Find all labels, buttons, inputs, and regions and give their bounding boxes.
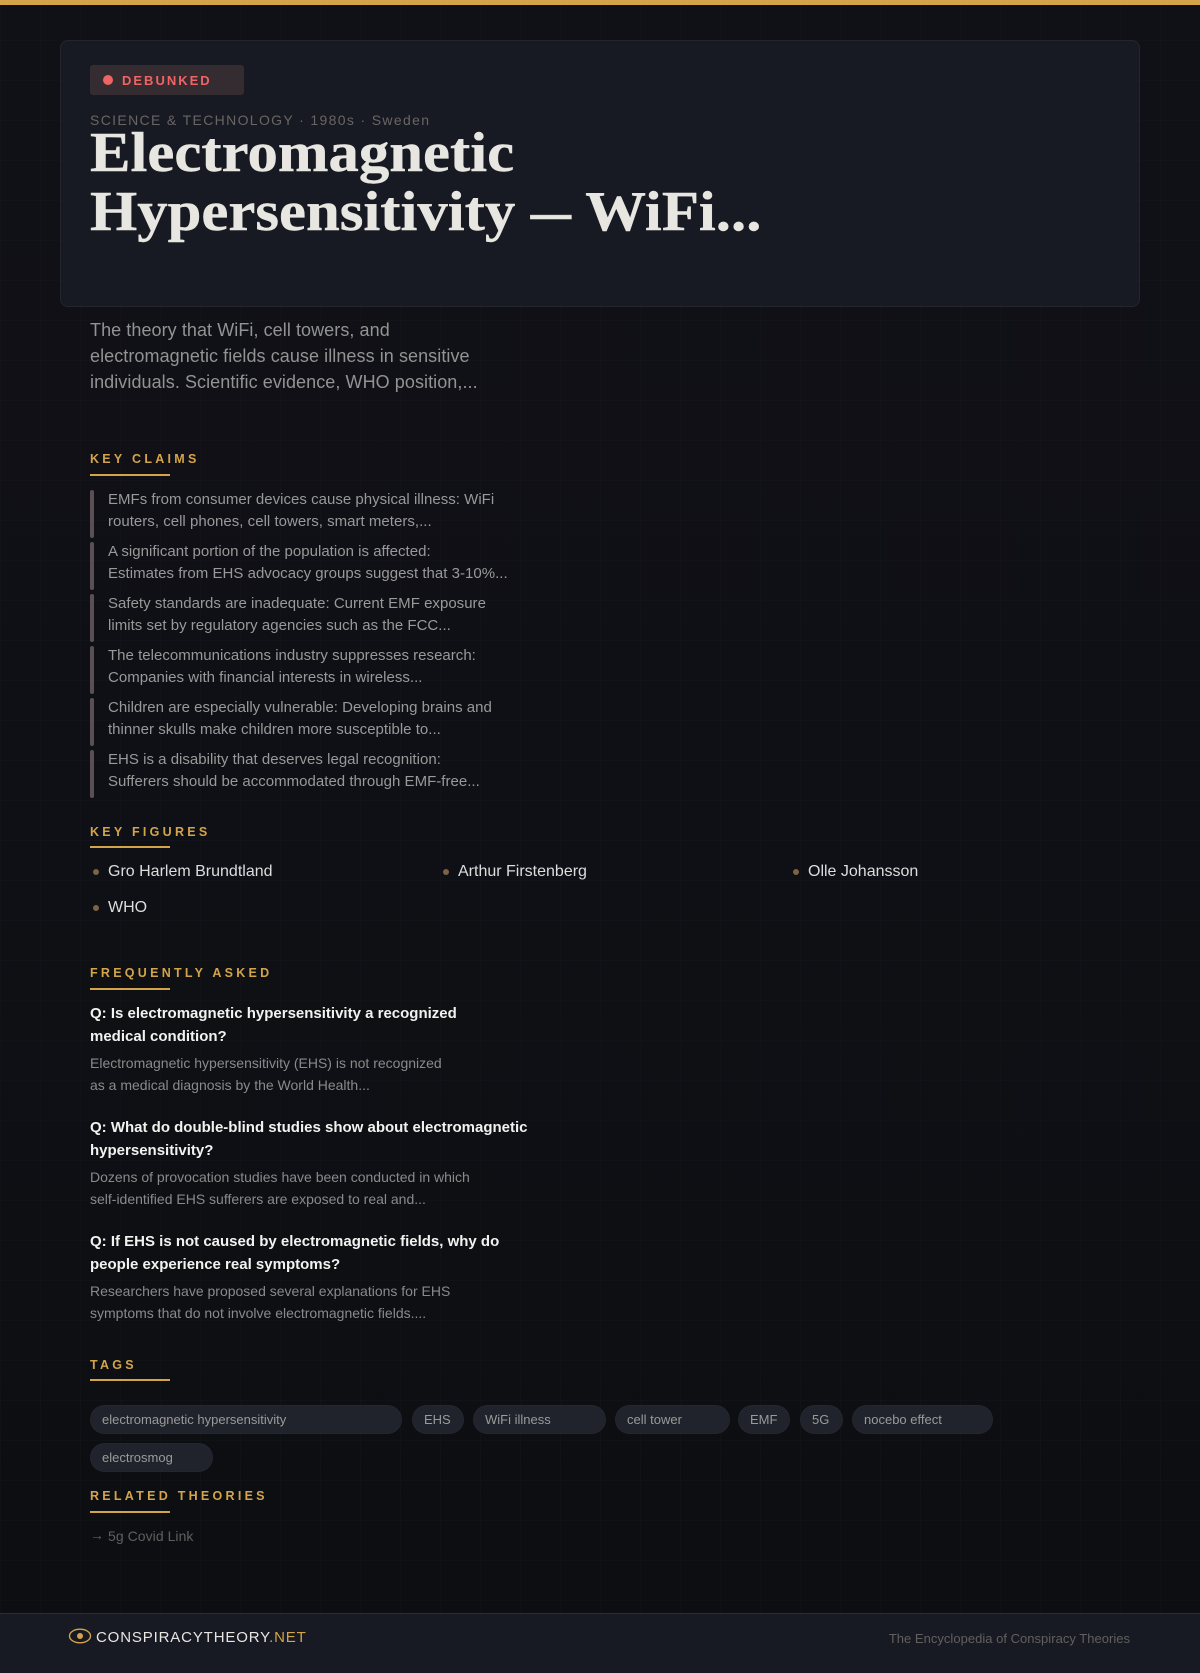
faq 3: people experience real symptoms?: [90, 1256, 340, 1272]
title: Electromagnetic: [90, 122, 514, 184]
claim 2: Estimates from EHS advocacy groups suggest that 3-10%...: [108, 565, 508, 582]
faq 1: as a medical diagnosis by the World Health...: [90, 1077, 370, 1093]
figure: WHO: WHO: [108, 899, 147, 916]
tags: EHS: [424, 1412, 451, 1427]
faq 2: Q: What do double-blind studies show about electromagnetic: [90, 1119, 528, 1136]
description: The theory that WiFi, cell towers, and: [90, 320, 390, 340]
faq 1: [90, 1005, 457, 1093]
figure: Johansson: Olle Johansson: [808, 863, 918, 880]
top accent bar: [0, 0, 1200, 5]
claim 4: Companies with financial interests in wireless...: [108, 669, 422, 686]
heading: key claims: KEY CLAIMS: [90, 452, 200, 466]
faq 2: [90, 1119, 528, 1207]
faq 2: Dozens of provocation studies have been conducted in which: [90, 1169, 470, 1185]
faq 3: Researchers have proposed several explanations for EHS: [90, 1283, 450, 1299]
footer: [0, 1613, 1200, 1673]
faq 2: hypersensitivity?: [90, 1142, 213, 1158]
claims list: [90, 490, 508, 798]
faq 3: [90, 1233, 499, 1321]
tags: [90, 1405, 993, 1472]
tags: 5G: [812, 1412, 829, 1427]
tags: EMF: [750, 1412, 777, 1427]
faq 1: medical condition?: [90, 1028, 227, 1044]
tags: cell tower: [627, 1412, 682, 1427]
icon: eye logo: [68, 1628, 92, 1644]
faq 1: Q: Is electromagnetic hypersensitivity a recognized: [90, 1005, 457, 1022]
claim 1: routers, cell phones, cell towers, smart meters,...: [108, 513, 432, 530]
faq 1: Electromagnetic hypersensitivity (EHS) is not recognized: [90, 1055, 442, 1071]
footer tagline: The Encyclopedia of Conspiracy Theories: [889, 1631, 1130, 1646]
faq 2: self-identified EHS sufferers are exposed to real and...: [90, 1191, 426, 1207]
claim 4: [90, 646, 476, 694]
status badge: debunked: DEBUNKED: [122, 73, 212, 88]
claim 6: EHS is a disability that deserves legal recognition:: [108, 751, 441, 768]
status badge: debunked: [90, 65, 244, 95]
claim 1: EMFs from consumer devices cause physical illness: WiFi: [108, 491, 494, 508]
description: individuals. Scientific evidence, WHO position,...: [90, 372, 478, 392]
description: [90, 320, 478, 392]
title: —: [530, 181, 571, 243]
claim 5: thinner skulls make children more susceptible to...: [108, 721, 441, 738]
panel: header card: [60, 40, 1140, 307]
claim 3: [90, 594, 486, 642]
claim 6: [90, 750, 480, 798]
title: Hypersensitivity WiFi...: [90, 181, 761, 243]
description: electromagnetic fields cause illness in sensitive: [90, 346, 470, 366]
figure: Firstenberg: Arthur Firstenberg: [458, 863, 587, 880]
figure: Brundtland: Gro Harlem Brundtland: [108, 863, 273, 880]
claim 2: A significant portion of the population is affected:: [108, 543, 431, 560]
claim 4: The telecommunications industry suppresses research:: [108, 647, 476, 664]
heading: key figures: KEY FIGURES: [90, 825, 210, 839]
tags: nocebo effect: [864, 1412, 942, 1427]
tags: electromagnetic hypersensitivity: [102, 1412, 286, 1427]
related link: → 5g Covid Link: [90, 1527, 193, 1544]
claim 1: [90, 490, 494, 538]
title: [90, 122, 761, 243]
claim 3: limits set by regulatory agencies such as the FCC...: [108, 617, 451, 634]
heading: related theories: RELATED THEORIES: [90, 1489, 268, 1503]
claim 6: Sufferers should be accommodated through EMF-free...: [108, 773, 480, 790]
faq 3: symptoms that do not involve electromagnetic fields....: [90, 1305, 426, 1321]
footer logo text: CONSPIRACYTHEORY.NET: [96, 1629, 307, 1646]
claim 5: [90, 698, 492, 746]
tags: WiFi illness: [485, 1412, 551, 1427]
faq 3: Q: If EHS is not caused by electromagnetic fields, why do: [90, 1233, 499, 1250]
claim 3: Safety standards are inadequate: Current EMF exposure: [108, 595, 486, 612]
claim 2: [90, 542, 508, 590]
category meta line: SCIENCE & TECHNOLOGY · 1980s · Sweden: [90, 112, 430, 128]
heading: frequently asked: FREQUENTLY ASKED: [90, 966, 272, 980]
claim 5: Children are especially vulnerable: Developing brains and: [108, 699, 492, 716]
heading: tags: TAGS: [90, 1358, 137, 1372]
tags: electrosmog: [102, 1450, 173, 1465]
